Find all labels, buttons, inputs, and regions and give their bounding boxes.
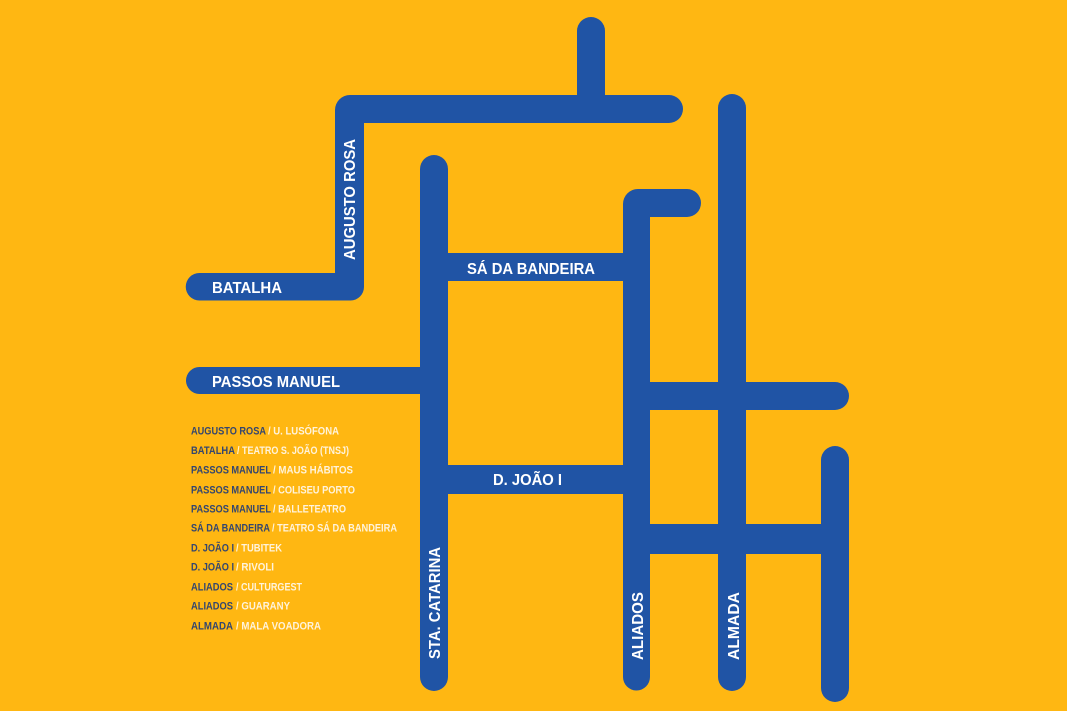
legend row: D. João I / Rivoli: [191, 560, 274, 574]
street: Almada: [718, 94, 746, 691]
street: top connector stub: [577, 17, 605, 100]
legend row: Augusto Rosa / U. Lusófona: / U. LUSÓFONA: [268, 424, 339, 438]
legend row: Passos Manuel / Coliseu Porto: / COLISEU PORTO: [273, 484, 355, 496]
street: D. João I: [445, 465, 627, 494]
legend row: Batalha / Teatro S. João: [191, 444, 349, 457]
legend row: Batalha / Teatro S. João: BATALHA: [191, 445, 235, 457]
legend row: Aliados / Culturgest: ALIADOS: [191, 582, 233, 594]
legend row: Sá da Bandeira / Teatro Sá da Bandeira: SÁ DA BANDEIRA: [191, 522, 270, 534]
legend row: Passos Manuel / Coliseu Porto: PASSOS MANUEL: [191, 484, 271, 496]
legend row: Batalha / Teatro S. João: / TEATRO S. JOÃO (TNSJ): [237, 444, 349, 457]
legend row: Aliados / Guarany: / GUARANY: [236, 600, 291, 612]
legend row: Aliados / Guarany: ALIADOS: [191, 600, 233, 612]
street map: [186, 17, 849, 702]
street: Sá da Bandeira: [445, 253, 627, 281]
legend: street and venue list: [191, 424, 397, 632]
label: Aliados: ALIADOS: [630, 592, 647, 660]
legend row: Aliados / Culturgest: / CULTURGEST: [236, 582, 302, 594]
legend row: Passos Manuel / Maus Hábitos: PASSOS MANUEL: [191, 464, 271, 476]
label: Sá da Bandeira: SÁ DA BANDEIRA: [467, 261, 595, 278]
legend row: Almada / Mala Voadora: [191, 620, 321, 632]
legend row: Aliados / Guarany: [191, 600, 291, 612]
legend row: Passos Manuel / Balleteatro: / BALLETEATRO: [273, 504, 346, 516]
label: Almada: ALMADA: [726, 592, 743, 660]
street: Passos Manuel: [186, 367, 425, 394]
street: Aliados: [623, 189, 701, 690]
street: far right vertical: [821, 446, 849, 702]
legend row: Passos Manuel / Maus Hábitos: / MAUS HÁBITOS: [273, 464, 353, 476]
label: Batalha: BATALHA: [212, 280, 282, 297]
label: Passos Manuel: PASSOS MANUEL: [212, 374, 340, 391]
legend row: Sá da Bandeira / Teatro Sá da Bandeira: / TEATRO SÁ DA BANDEIRA: [272, 522, 397, 534]
legend row: D. João I / Tubitek: D. JOÃO I: [191, 542, 234, 554]
legend row: D. João I / Rivoli: / RIVOLI: [236, 562, 274, 574]
label: Augusto Rosa: AUGUSTO ROSA: [342, 139, 359, 260]
legend row: D. João I / Tubitek: / TUBITEK: [236, 542, 282, 554]
legend row: Passos Manuel / Maus Hábitos: [191, 464, 353, 476]
legend row: Passos Manuel / Balleteatro: PASSOS MANUEL: [191, 504, 271, 516]
street: Sta. Catarina: [420, 155, 448, 691]
legend row: Passos Manuel / Balleteatro: [191, 504, 346, 516]
label: Sta. Catarina: STA. CATARINA: [427, 547, 444, 659]
legend row: Passos Manuel / Coliseu Porto: [191, 484, 355, 496]
label: D. João I: D. JOÃO I: [493, 471, 562, 489]
legend row: Almada / Mala Voadora: ALMADA: [191, 620, 233, 632]
street: Batalha and Augusto Rosa: [186, 95, 683, 300]
legend row: Aliados / Culturgest: [191, 582, 302, 594]
legend row: Augusto Rosa / U. Lusófona: [191, 424, 339, 438]
legend row: Augusto Rosa / U. Lusófona: AUGUSTO ROSA: [191, 426, 266, 438]
legend row: D. João I / Tubitek: [191, 542, 282, 554]
street: lower connector: [646, 524, 826, 554]
legend row: Sá da Bandeira / Teatro Sá da Bandeira: [191, 522, 397, 534]
street: right connector: [646, 382, 849, 410]
legend row: Almada / Mala Voadora: / MALA VOADORA: [236, 620, 321, 632]
legend row: D. João I / Rivoli: D. JOÃO I: [191, 560, 234, 574]
